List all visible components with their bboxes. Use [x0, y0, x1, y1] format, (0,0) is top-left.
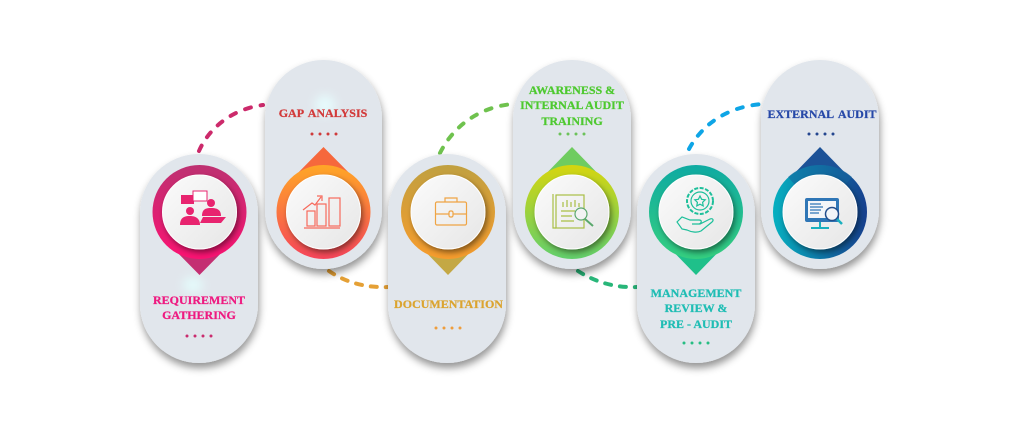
icon: hand with award gear [677, 188, 713, 232]
icon: briefcase [436, 198, 466, 225]
panel: documentation [388, 154, 506, 363]
connector: management review to external audit [689, 104, 762, 149]
heading: awareness and internal audit training: TRAINING [541, 114, 603, 128]
connector: requirement gathering to gap analysis [199, 105, 263, 151]
pin: awareness [525, 147, 619, 259]
pin: gap analysis [276, 147, 370, 259]
heading: requirement gathering: GATHERING [162, 308, 236, 322]
heading: external audit: EXTERNAL AUDIT [767, 107, 877, 121]
heading: management review and pre-audit: PRE - AUDIT [660, 317, 732, 331]
dots [682, 342, 710, 344]
panel: external audit [761, 60, 879, 269]
dots [186, 334, 212, 338]
icon: meeting people [180, 191, 226, 225]
heading: management review and pre-audit: REVIEW & [665, 301, 727, 315]
heading: awareness and internal audit training: AWARENESS & [529, 83, 615, 97]
heading: gap analysis: GAP ANALYSIS [279, 106, 368, 120]
icon: bar chart growth [303, 196, 340, 228]
panel: management review and pre-audit [637, 154, 755, 363]
panel: awareness and internal audit training [513, 60, 631, 269]
icon: report with magnifier [553, 194, 593, 228]
dots [808, 132, 834, 136]
connector: gap analysis to documentation [329, 271, 388, 287]
panel: gap analysis [265, 60, 382, 269]
heading: management review and pre-audit: MANAGEMENT [651, 286, 741, 300]
icon: monitor with magnifier [805, 198, 842, 228]
dots [310, 132, 338, 136]
pin: documentation [401, 165, 495, 275]
heading: requirement gathering: REQUIREMENT [153, 293, 245, 307]
pin: requirement gathering [152, 165, 246, 275]
dots [434, 326, 462, 330]
connector: documentation to awareness [440, 104, 513, 153]
pin: management review [649, 165, 743, 275]
pin: external audit [773, 147, 867, 259]
heading: awareness and internal audit training: INTERNAL AUDIT [520, 98, 624, 112]
heading: documentation: DOCUMENTATION [394, 297, 503, 311]
connector: awareness to management review [578, 271, 637, 287]
panel: requirement gathering [140, 154, 258, 363]
dots [558, 132, 586, 136]
